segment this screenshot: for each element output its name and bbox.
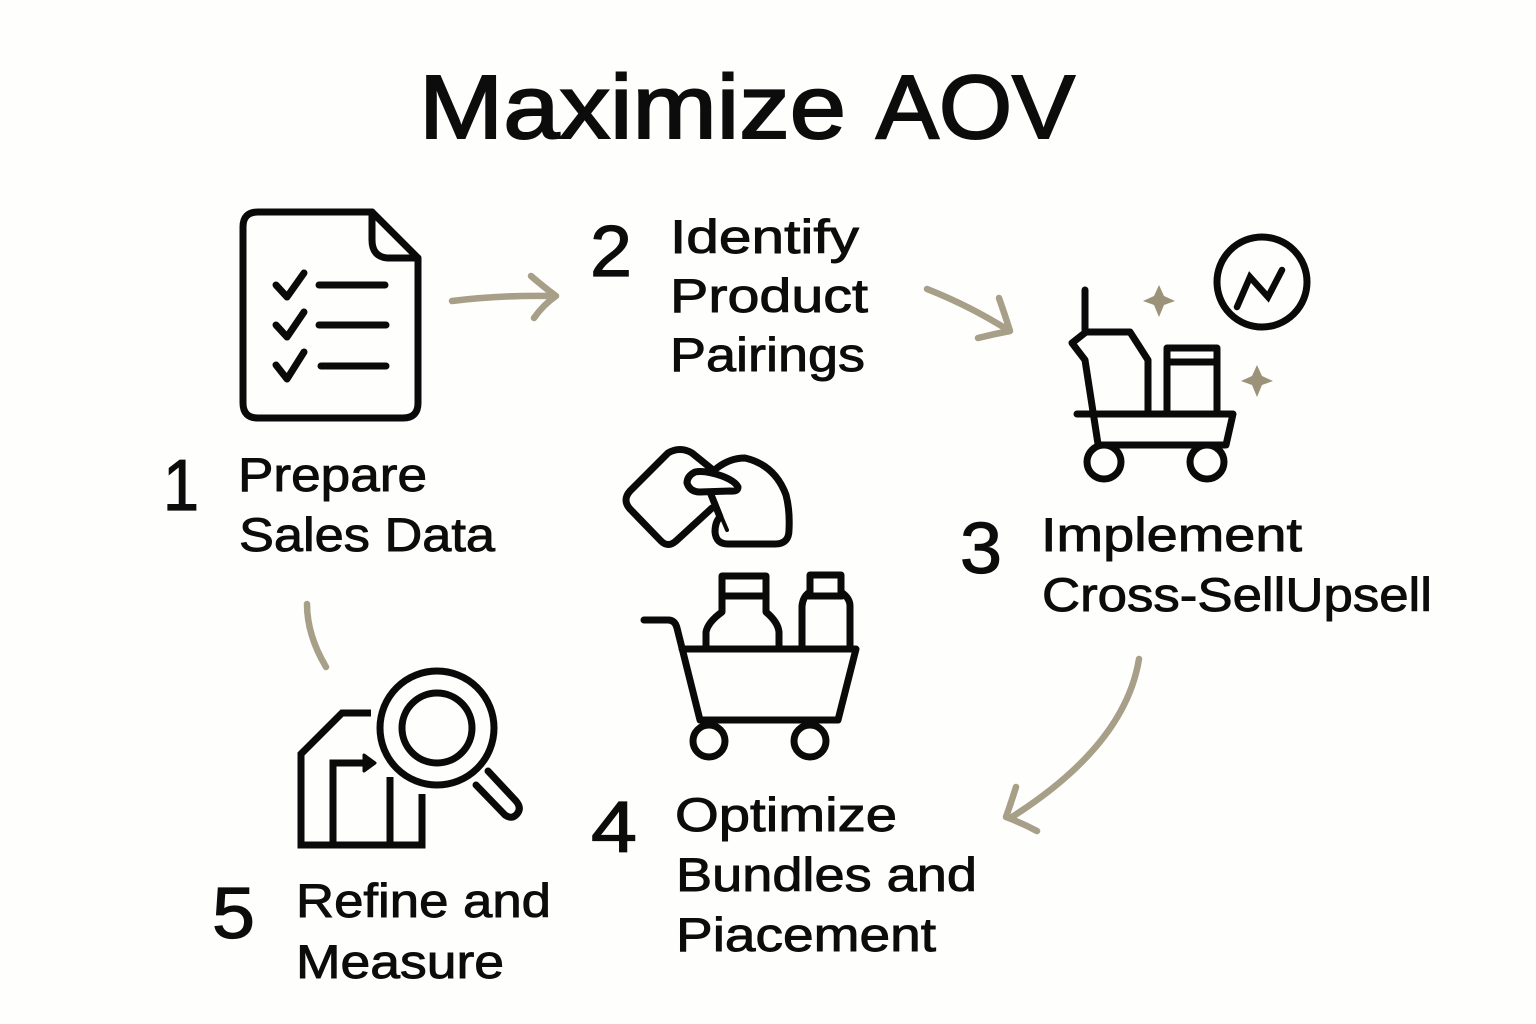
icon: checklist document: [243, 212, 418, 418]
step 1 label: 1: [163, 446, 199, 526]
title: [419, 58, 1075, 158]
step 1 label: Prepare: [238, 448, 427, 501]
arrow: step 2 to step 3: [927, 289, 1010, 338]
step 2 label: Identify: [670, 210, 860, 263]
step 5 label: [212, 874, 551, 988]
step 3 label: Cross-SellUpsell: [1042, 568, 1432, 621]
step 3 label: [960, 508, 1432, 621]
step 1 label: Sales Data: [239, 508, 496, 561]
step 5 label: Refine and: [296, 874, 551, 927]
step 4 label: Optimize: [675, 788, 897, 841]
arrow: step 5 to step 1: [307, 604, 326, 667]
step 3 label: Implement: [1041, 508, 1302, 561]
title: Maximize: [419, 58, 846, 158]
step 2 label: 2: [590, 212, 632, 292]
step 5 label: Measure: [296, 935, 504, 988]
step 1 label: [163, 446, 496, 561]
icon: shopping cart with bottles: [644, 575, 856, 757]
step 4 label: Bundles and: [676, 848, 977, 901]
step 5 label: 5: [212, 874, 255, 954]
arrow: step 1 to step 2: [452, 276, 556, 318]
icon: sparkles: [1143, 285, 1273, 397]
step 4 label: [591, 788, 977, 961]
title: AOV: [876, 58, 1075, 158]
step 2 label: Product: [670, 269, 868, 322]
step 2 label: [590, 210, 868, 381]
step 2 label: Pairings: [670, 328, 865, 381]
icon: price tag and bag: [626, 450, 789, 544]
step 4 label: Piacement: [676, 908, 936, 961]
icon: trolley with chart badge: [1072, 237, 1307, 479]
step 3 label: 3: [960, 509, 1002, 589]
arrow: step 3 to step 4: [1006, 659, 1139, 831]
icon: magnifier over bar chart: [301, 671, 519, 845]
step 4 label: 4: [591, 788, 637, 868]
